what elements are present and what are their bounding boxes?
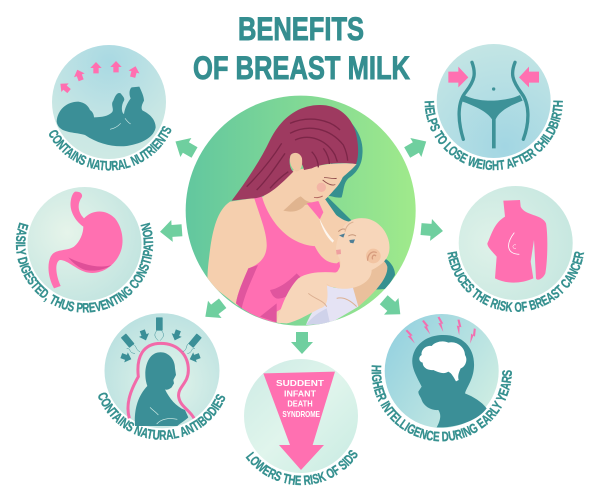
arrow: to antibodies: [199, 295, 229, 325]
icon: pink down arrow with label: INFANT: [284, 388, 316, 398]
caption: CONTAINS NATURAL NUTRIENTS: [49, 126, 172, 171]
caption: HIGHER INTELLIGENCE DURING EARLY YEARS: [371, 365, 512, 442]
caption: HELPS TO LOSE WEIGHT AFTER CHILDBIRTH: [424, 100, 563, 170]
arrow: to natural nutrients: [170, 132, 200, 162]
icon: waist and hips: [448, 62, 539, 148]
icon: pink down arrow with label: SYNDROME: [282, 409, 320, 419]
icon: baby with nutrient arrows: [57, 61, 156, 146]
panel: breast cancer: [447, 186, 584, 312]
icon: head with brain: [405, 317, 487, 427]
icon: pink down arrow with label: [263, 372, 335, 470]
title: OF BREAST MILK: [193, 50, 410, 86]
caption: EASILY DIGESTED, THUS PREVENTING CONSTIPATION: [16, 222, 154, 313]
panel: higher intelligence: [371, 314, 512, 442]
arrow: to intelligence: [376, 291, 408, 323]
arrow: to breast cancer risk: [420, 218, 444, 242]
arrow: to SIDS: [291, 332, 313, 354]
panel: natural antibodies: [98, 313, 226, 440]
icon: protected baby: [119, 317, 202, 426]
arrow: to easy digestion: [159, 219, 183, 243]
panel: easily digested: [16, 187, 154, 313]
title: [193, 11, 410, 86]
caption: CONTAINS NATURAL ANTIBODIES: [98, 392, 226, 440]
panel: weight loss: [424, 44, 563, 170]
central illustration: mother breastfeeding baby: [186, 96, 416, 326]
icon: stomach: [48, 192, 123, 288]
caption: LOWERS THE RISK OF SIDS: [246, 450, 358, 486]
icon: female torso: [487, 200, 547, 283]
panel: lowers SIDS risk: [244, 359, 358, 486]
arrow: to weight loss: [402, 132, 432, 162]
caption: REDUCES THE RISK OF BREAST CANCER: [447, 251, 584, 312]
icon: pink down arrow with label: SUDDENT: [276, 378, 324, 388]
icon: pink down arrow with label: DEATH: [287, 399, 313, 409]
title: BENEFITS: [238, 11, 364, 47]
panel: natural nutrients: [49, 45, 172, 171]
